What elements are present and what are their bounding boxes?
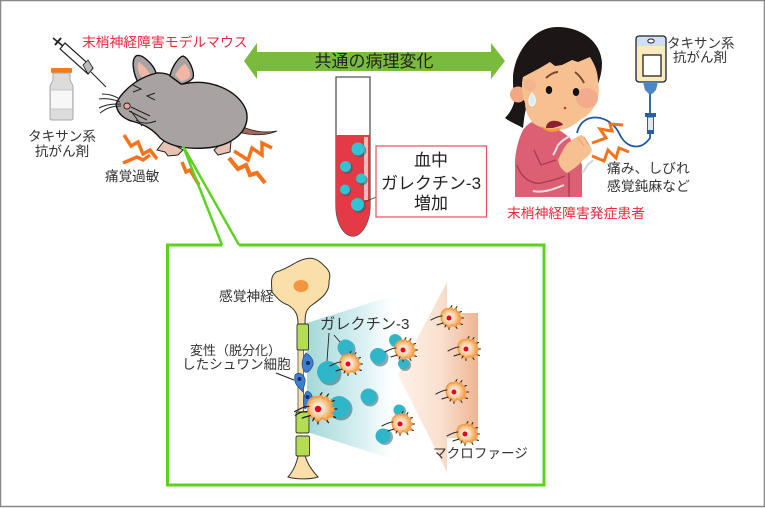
- label: symptoms: 感覚鈍麻など: [607, 178, 690, 194]
- icon: syringe: [53, 38, 106, 87]
- callout: blood galectin-3 increase: ガレクチン-3: [381, 174, 481, 193]
- label: taxane right: 抗がん剤: [673, 50, 727, 65]
- label: macrophage: マクロファージ: [433, 446, 528, 461]
- label: symptoms: [607, 160, 690, 194]
- callout: blood galectin-3 increase: 増加: [414, 194, 448, 213]
- heading: model mouse: 末梢神経障害モデルマウス: [82, 34, 248, 50]
- gray cuff squiggle: [582, 160, 593, 173]
- Schwann cells: [295, 353, 313, 409]
- label: degenerated Schwann cells: したシュワン細胞: [182, 357, 291, 372]
- macrophages: [295, 306, 480, 446]
- galectin leader lines: [327, 333, 340, 361]
- illustration: patient: [505, 27, 650, 197]
- face: [522, 57, 599, 130]
- label: sensory nerve: 感覚神経: [219, 288, 274, 304]
- label: patient heading: 末梢神経障害発症患者: [507, 206, 645, 221]
- ear: [510, 86, 526, 102]
- label: degenerated Schwann cells: 変性（脱分化）: [190, 343, 281, 358]
- macrophage migration arrow: [398, 282, 478, 472]
- neuron: [271, 258, 330, 479]
- tail: [242, 127, 277, 135]
- callout: blood galectin-3 increase: 血中: [414, 151, 448, 170]
- right ear: [170, 56, 193, 84]
- galectin spread cone: [307, 296, 392, 459]
- label: symptoms: 痛み、しびれ: [607, 160, 690, 176]
- icon: IV drip bag: [636, 36, 666, 134]
- illustration: mouse: [99, 56, 277, 156]
- arrow: shared pathology double arrow: [244, 43, 505, 79]
- label: taxane left: [28, 129, 96, 159]
- label: galectin-3: ガレクチン-3: [320, 316, 409, 333]
- blue tube: [577, 118, 650, 146]
- icon: pain bolts around mouse: [123, 135, 272, 185]
- hand: [558, 135, 592, 173]
- illustration: test tube: [336, 77, 394, 236]
- body: [116, 73, 247, 148]
- label: taxane right: [667, 36, 734, 65]
- label: taxane left: 抗がん剤: [35, 144, 89, 159]
- panel: nerve detail: [168, 146, 544, 485]
- body: [515, 122, 582, 197]
- galectin-3 circles: [318, 334, 411, 445]
- callout: blood galectin-3 increase: [376, 146, 486, 217]
- label: taxane left: タキサン系: [28, 129, 96, 144]
- label: shared pathology: 共通の病理変化: [314, 52, 434, 71]
- icon: drug vial: [50, 68, 73, 120]
- left ear: [133, 56, 156, 84]
- feet: [157, 141, 183, 156]
- label: taxane right: タキサン系: [667, 36, 734, 51]
- pain bolts: [592, 124, 623, 143]
- label: degenerated Schwann cells: [182, 343, 291, 372]
- nose: [124, 103, 130, 109]
- eyes and whiskers: [99, 85, 156, 126]
- label: hyperalgesia: 痛覚過敏: [105, 168, 160, 184]
- hair back: [505, 27, 602, 128]
- callout lines from mouse: [183, 146, 239, 245]
